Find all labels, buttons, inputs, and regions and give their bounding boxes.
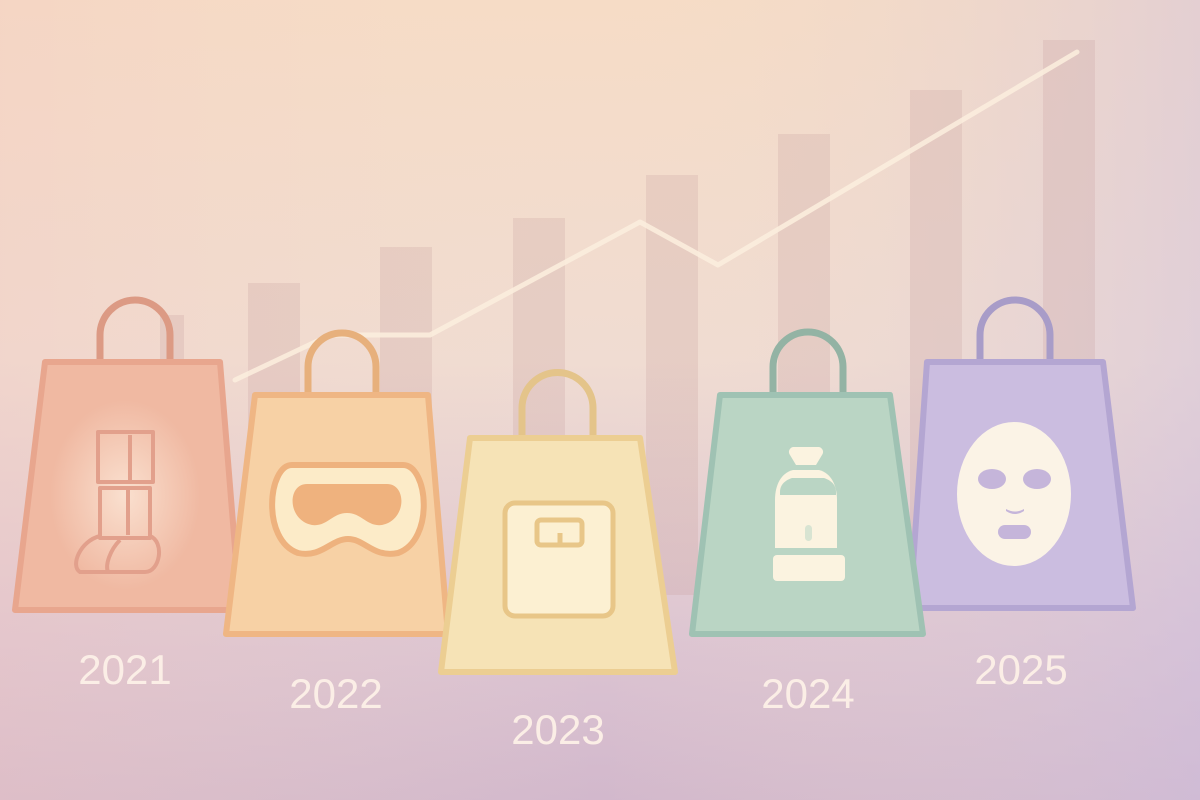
bag 2021 <box>15 300 240 610</box>
year labels: 2023 <box>511 706 605 753</box>
bag 2024 <box>692 332 923 634</box>
year labels: 2021 <box>78 646 172 693</box>
trend line <box>235 52 1077 380</box>
icon: bottle <box>773 447 845 581</box>
year labels: 2024 <box>761 670 855 717</box>
icon: eye mask <box>272 465 424 554</box>
bag 2022 <box>226 333 448 634</box>
icon: face mask <box>957 422 1071 566</box>
bar chart <box>160 40 1095 605</box>
icon: compression boot <box>76 432 159 572</box>
icon: scale <box>505 503 613 616</box>
bag 2025 <box>910 300 1133 608</box>
year labels: 2025 <box>974 646 1068 693</box>
year labels: 2022 <box>289 670 383 717</box>
year labels <box>78 646 1068 753</box>
bag 2023 <box>441 372 675 672</box>
